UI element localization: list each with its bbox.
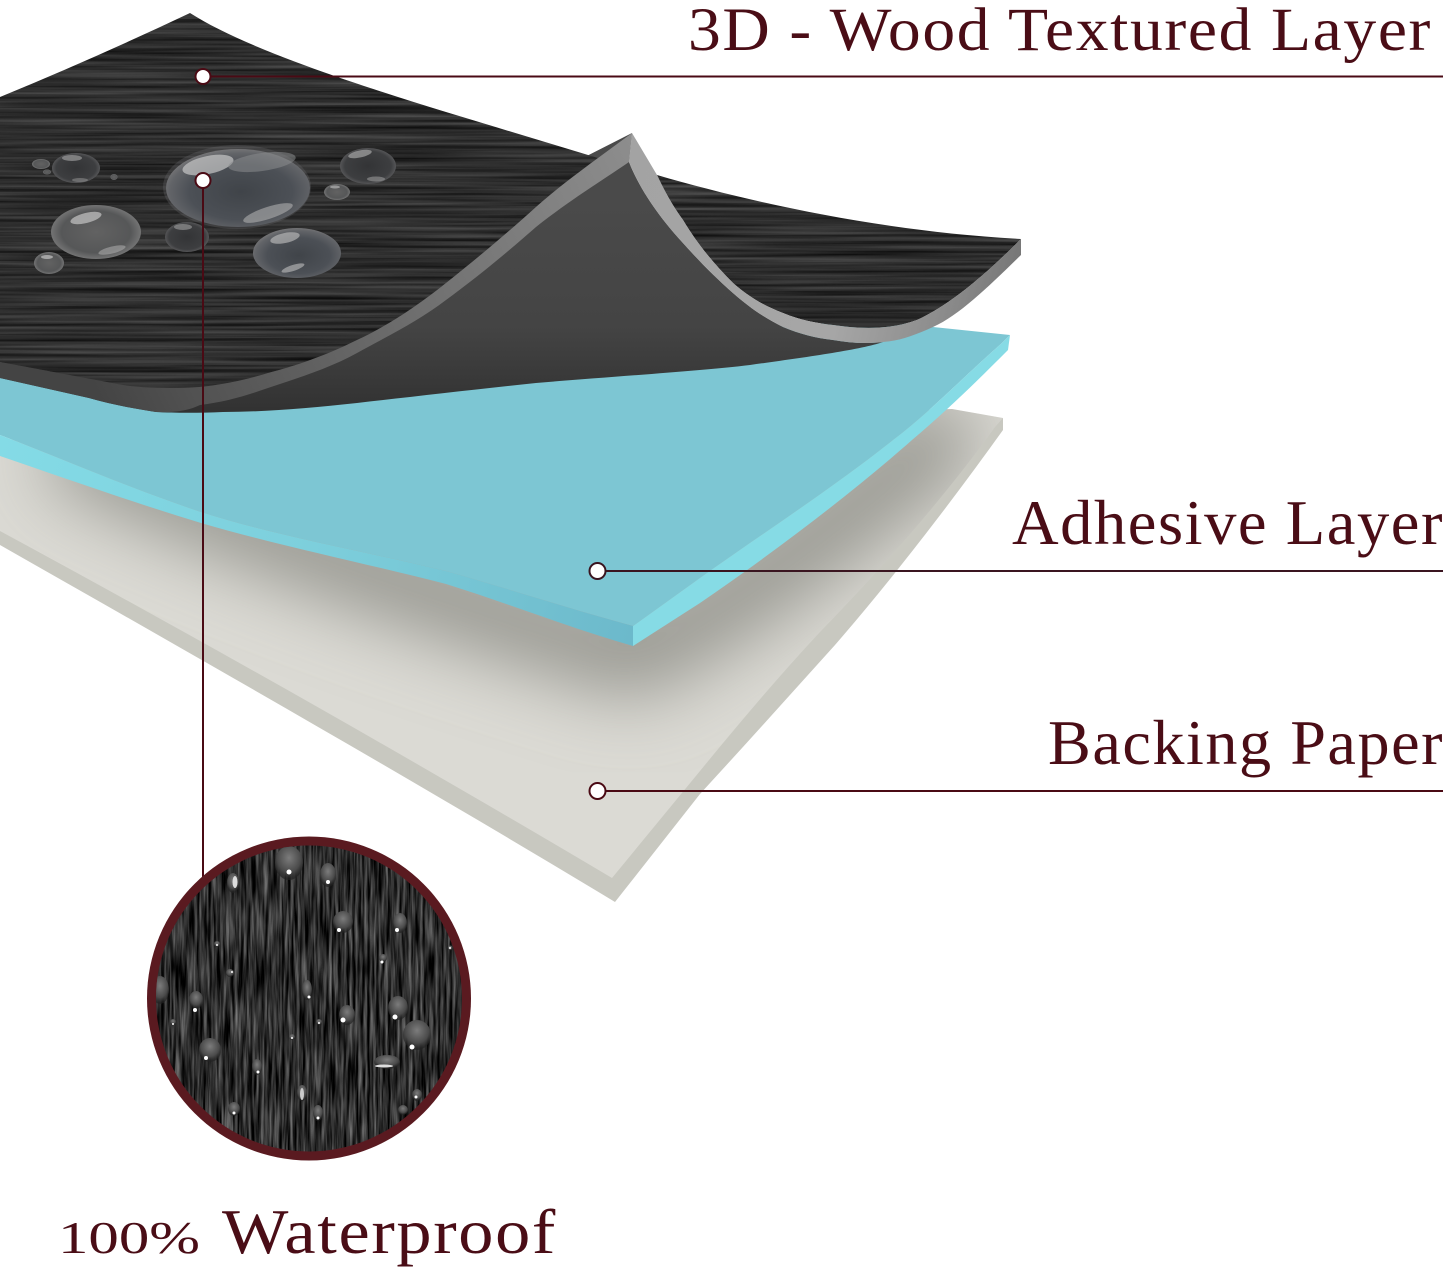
waterproof close-up circle	[147, 836, 471, 1160]
droplets tiny	[32, 159, 118, 180]
backing paper layer	[0, 409, 1003, 902]
leader line: backing paper	[597, 790, 1443, 792]
heading: adhesive layer: Adhesive Layer	[1012, 488, 1444, 558]
sheet underside	[0, 133, 883, 413]
adhesive layer	[0, 320, 1010, 646]
droplet mid left	[51, 205, 141, 259]
wood surface left	[0, 13, 598, 386]
wood surface right	[657, 175, 1021, 328]
leader line: adhesive layer	[597, 570, 1443, 572]
heading: 100% waterproof: Waterproof	[222, 1196, 557, 1267]
droplet lower right	[253, 228, 341, 278]
adhesive right edge	[633, 335, 1010, 646]
heading: 100% waterproof: 100%	[58, 1212, 200, 1263]
droplet upper right	[340, 148, 396, 184]
marker: wood layer	[196, 69, 210, 84]
marker: adhesive layer	[590, 563, 606, 579]
circle ring	[147, 836, 471, 1160]
leader line: waterproof	[202, 180, 204, 905]
droplet small right	[324, 184, 350, 200]
backing paper shadow	[60, 420, 960, 655]
marker: backing paper	[590, 783, 606, 799]
backing paper side edge	[0, 418, 1003, 902]
adhesive top face	[0, 320, 1010, 626]
leader line: wood layer	[203, 76, 1443, 78]
marker: waterproof	[196, 173, 210, 188]
circle droplets	[151, 846, 452, 1121]
droplet upper left	[52, 153, 100, 183]
droplet center small	[165, 222, 209, 252]
left curled edge	[0, 133, 632, 412]
adhesive front edge	[0, 435, 633, 646]
circle wood grain	[150, 840, 470, 1160]
right curled edge	[629, 133, 1021, 343]
heading: 100% waterproof	[58, 1196, 557, 1267]
backing paper top face	[0, 409, 1003, 878]
3D wood textured layer	[0, 0, 1030, 413]
droplet small lower left	[34, 252, 64, 274]
water droplets	[32, 145, 396, 278]
heading: backing paper: Backing Paper	[1048, 708, 1444, 778]
droplet large	[163, 145, 311, 229]
